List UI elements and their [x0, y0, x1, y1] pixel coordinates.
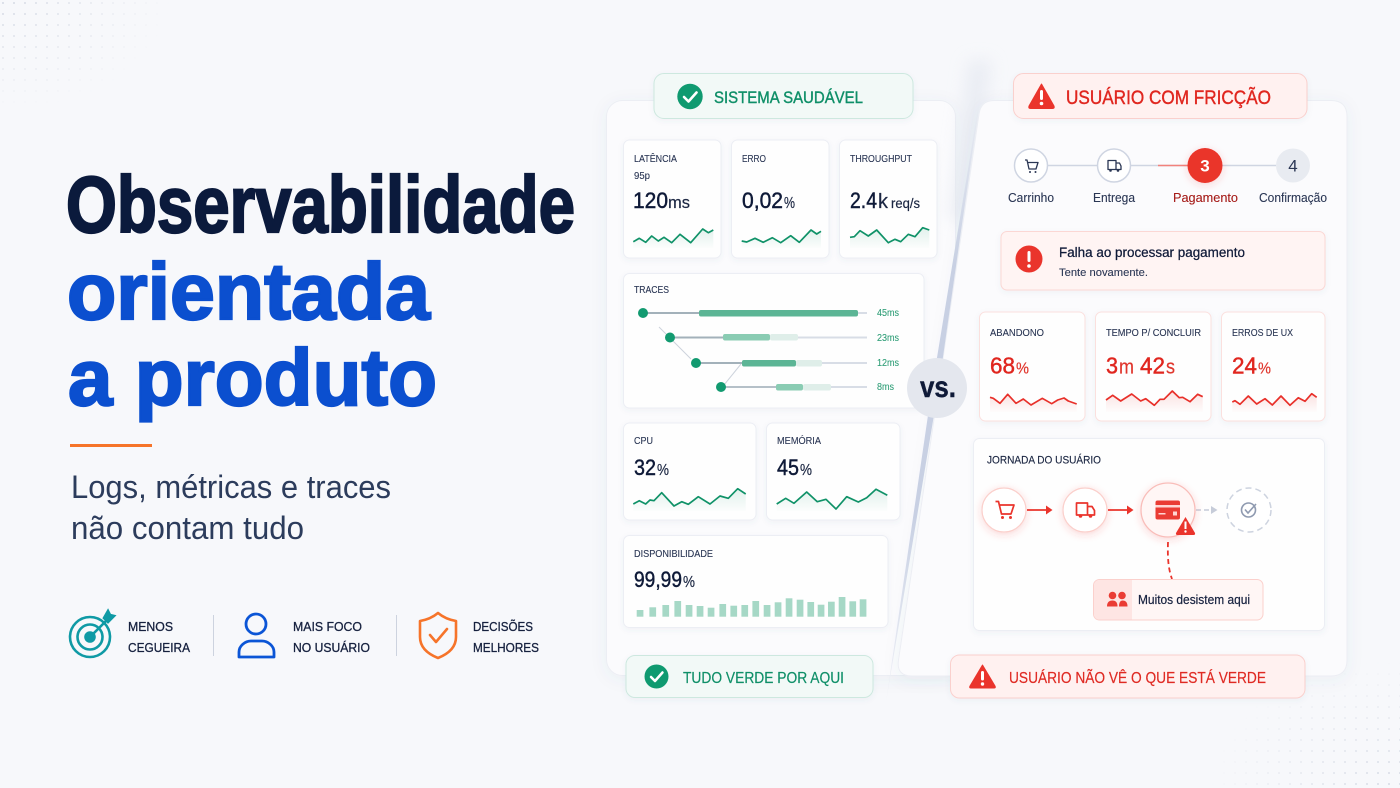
panel: jornada do usuario	[974, 438, 1324, 630]
card: throughput: k	[878, 191, 889, 213]
step: carrinho	[1008, 149, 1054, 205]
badge: sistema saudavel: SISTEMA SAUDÁVEL	[714, 88, 863, 107]
card: latencia: LATÊNCIA	[634, 152, 677, 165]
card: latencia	[624, 140, 721, 258]
card: disponibilidade: DISPONIBILIDADE	[634, 548, 713, 560]
card: erro: 0,02	[742, 188, 783, 213]
badge: tudo verde: TUDO VERDE POR AQUI	[683, 670, 844, 687]
chart: traces: 8ms	[877, 382, 894, 393]
card: latencia: 95p	[634, 170, 650, 182]
alert: falha ao processar pagamento: Falha ao processar pagamento	[1059, 245, 1245, 260]
benefit: menos cegueira: MENOS	[128, 619, 173, 634]
card: cpu	[624, 423, 756, 520]
card: memoria: %	[800, 462, 812, 479]
chart: traces: 12ms	[877, 358, 899, 369]
card: disponibilidade: %	[683, 574, 695, 591]
icon: warning	[1176, 517, 1195, 535]
card: erro: %	[784, 195, 795, 212]
card: abandono: ABANDONO	[990, 327, 1044, 339]
card: throughput: THROUGHPUT	[850, 153, 912, 165]
chart: traces: 23ms	[877, 333, 899, 344]
chart: traces: 45ms	[877, 308, 899, 319]
accent rule	[70, 444, 152, 447]
title: orientada	[67, 247, 431, 336]
card: erros de ux	[1222, 312, 1325, 421]
benefit: mais foco no usuario: NO USUÁRIO	[293, 640, 370, 655]
card: tempo para concluir: s	[1166, 356, 1175, 378]
card: disponibilidade: 99,99	[634, 567, 682, 592]
dashed connector	[1168, 542, 1172, 579]
benefit: decisoes melhores: MELHORES	[473, 640, 539, 655]
arrow: dashed para confirmacao	[1196, 506, 1218, 514]
card: erros de ux: %	[1258, 360, 1271, 378]
badge: tudo verde	[626, 656, 873, 698]
card: tempo para concluir: 42	[1140, 352, 1165, 378]
panel: sistema saudavel	[606, 74, 956, 698]
step: pagamento: Pagamento	[1173, 191, 1238, 205]
icon: check node	[1227, 488, 1271, 532]
card: erros de ux: ERROS DE UX	[1232, 327, 1293, 339]
card: cpu: %	[657, 462, 669, 479]
card: disponibilidade	[624, 536, 888, 628]
title: a produto	[68, 333, 437, 422]
card: throughput: 2.4	[850, 188, 877, 213]
panel: usuario com friccao	[898, 74, 1347, 698]
card: memoria: 45	[777, 455, 799, 480]
vs badge	[907, 358, 967, 418]
title: Observabilidade	[66, 160, 575, 249]
dot pattern bottom right	[1256, 696, 1400, 785]
card: memoria: MEMÓRIA	[777, 434, 821, 447]
arrow: entrega para pagamento	[1108, 506, 1134, 514]
icon: target	[70, 611, 114, 657]
benefit: menos cegueira: CEGUEIRA	[128, 640, 190, 655]
benefit: decisoes melhores: DECISÕES	[473, 619, 533, 634]
card: tempo para concluir: TEMPO P/ CONCLUIR	[1106, 327, 1201, 339]
step: carrinho: Carrinho	[1008, 191, 1054, 205]
badge: usuario com friccao	[1014, 74, 1307, 118]
divider	[886, 78, 983, 702]
icon: cart node	[982, 488, 1026, 532]
arrow: carrinho para entrega	[1027, 506, 1052, 514]
card: erro: ERRO	[742, 153, 766, 165]
card: tempo para concluir	[1096, 312, 1211, 421]
callout: muitos desistem aqui	[1094, 580, 1263, 620]
icon: truck node	[1063, 488, 1107, 532]
card: cpu: CPU	[634, 435, 653, 447]
badge: usuario nao ve	[950, 655, 1305, 698]
card: throughput	[840, 140, 937, 258]
vs badge: vs.	[920, 371, 956, 404]
step: confirmacao: Confirmação	[1259, 191, 1327, 205]
bar chart: disponibilidade	[637, 597, 866, 617]
subtitle	[71, 469, 391, 546]
step: entrega	[1093, 149, 1135, 205]
step: pagamento	[1173, 148, 1238, 205]
card: memoria	[766, 423, 900, 520]
benefit: mais foco no usuario: MAIS FOCO	[293, 619, 362, 634]
card: latencia: 120	[633, 188, 668, 213]
subtitle: não contam tudo	[71, 510, 304, 546]
dot pattern top left	[2, 2, 124, 80]
chart: traces	[624, 274, 924, 408]
card: tempo para concluir: m	[1119, 356, 1134, 378]
icon: shield	[420, 613, 456, 658]
card: abandono: 68	[990, 352, 1015, 378]
card: throughput: req/s	[891, 195, 920, 211]
card: tempo para concluir: 3	[1106, 352, 1118, 378]
card: latencia: ms	[668, 193, 690, 212]
stepper	[1008, 148, 1327, 205]
step: confirmacao	[1259, 148, 1327, 205]
step: confirmacao: 4	[1288, 156, 1298, 176]
title	[66, 160, 575, 422]
benefit: mais foco no usuario	[239, 614, 370, 657]
panel: jornada do usuario: JORNADA DO USUÁRIO	[987, 454, 1101, 466]
benefit: menos cegueira	[70, 611, 190, 657]
step: entrega: Entrega	[1093, 191, 1135, 205]
callout: muitos desistem aqui: Muitos desistem aqui	[1138, 593, 1250, 607]
alert: falha ao processar pagamento	[1001, 232, 1325, 290]
badge: sistema saudavel	[654, 74, 913, 118]
card: erro	[732, 140, 829, 258]
chart: traces: TRACES	[634, 284, 669, 296]
card: cpu: 32	[634, 455, 656, 480]
icon: user	[239, 614, 274, 657]
step: pagamento: 3	[1200, 156, 1210, 176]
card: abandono: %	[1016, 360, 1029, 378]
alert: falha ao processar pagamento: Tente novamente.	[1059, 267, 1148, 279]
badge: usuario com friccao: USUÁRIO COM FRICÇÃO	[1066, 87, 1271, 109]
icon: people	[1107, 592, 1128, 606]
icon: card node	[1141, 483, 1195, 537]
card: erros de ux: 24	[1232, 352, 1257, 378]
card: abandono	[980, 312, 1085, 421]
subtitle: Logs, métricas e traces	[71, 469, 391, 505]
badge: usuario nao ve: USUÁRIO NÃO VÊ O QUE ESTÁ VERDE	[1009, 667, 1266, 687]
benefit: decisoes melhores	[420, 613, 539, 658]
